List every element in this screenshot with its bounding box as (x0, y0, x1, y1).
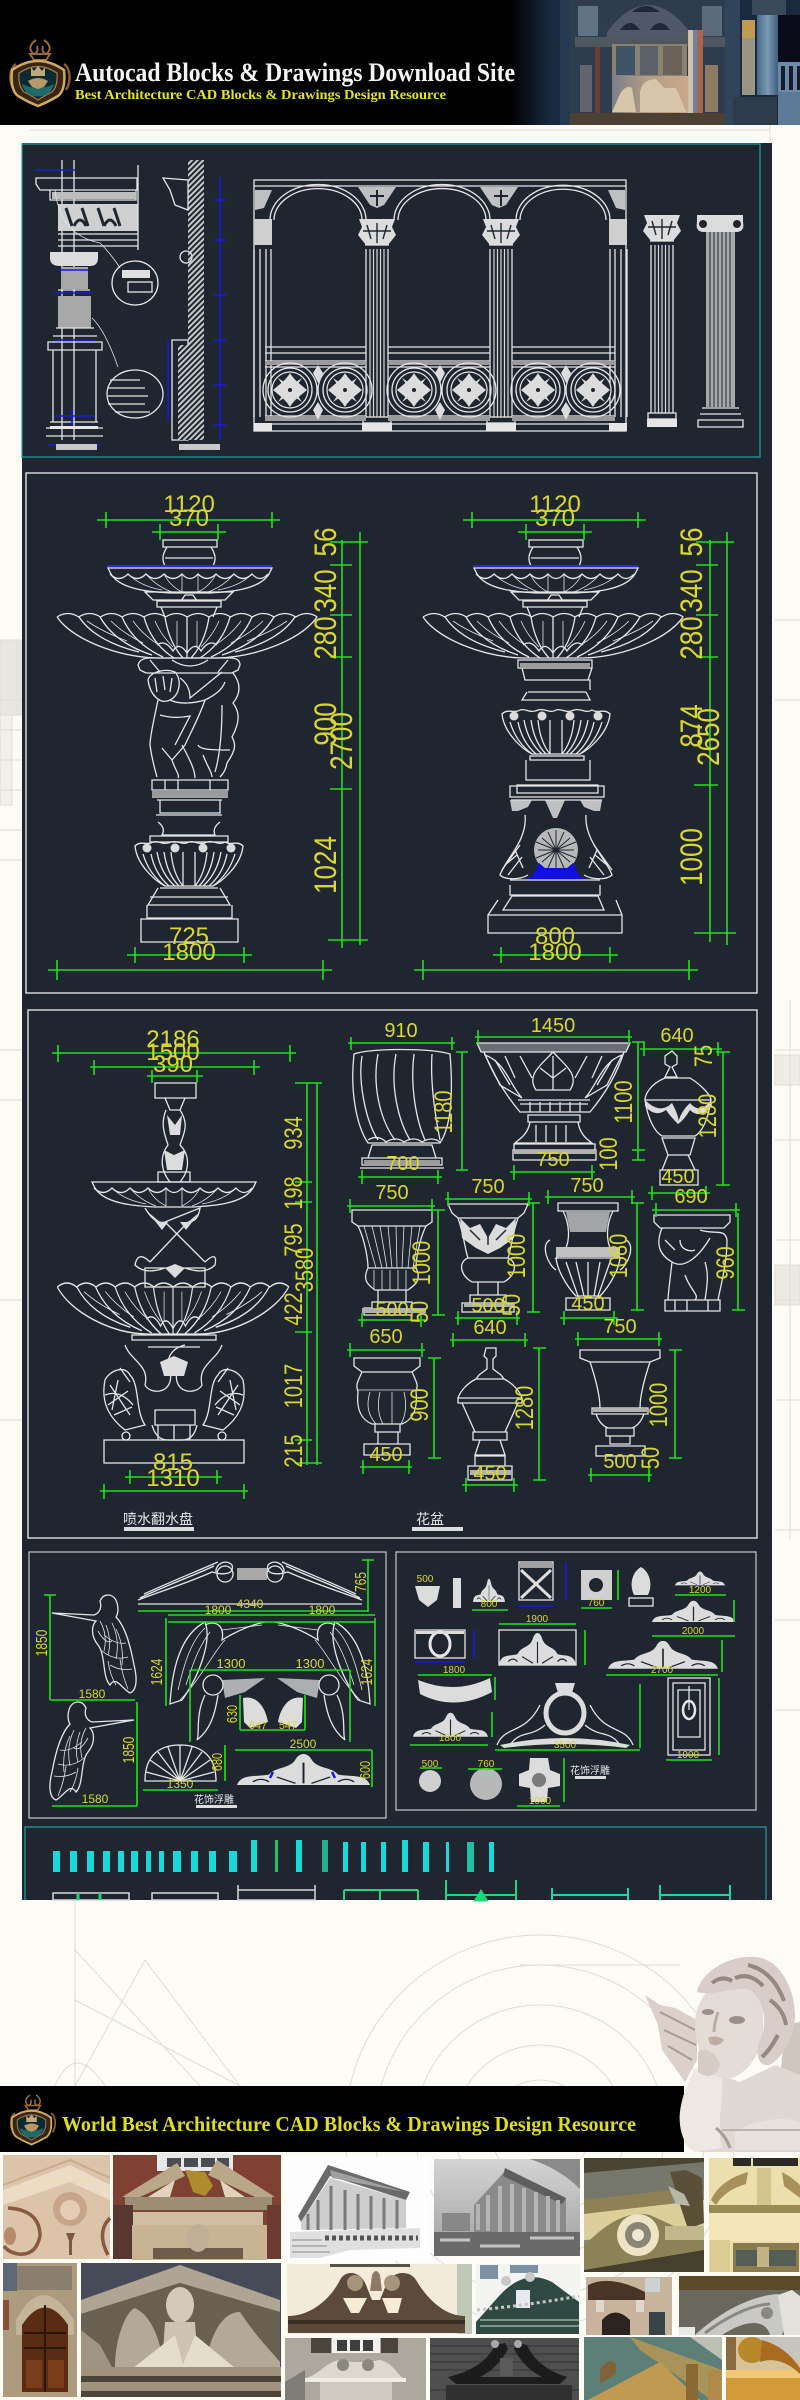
dimensions: fountain 2: 800 (535, 923, 575, 950)
dimensions: fountain 1: 370 (169, 505, 209, 532)
row one ornaments: 760 (588, 1598, 605, 1609)
photo collage (3, 2153, 800, 2400)
photo: parthenon engraving (285, 2157, 430, 2261)
dimensions: three tier fountain: 1017 (280, 1364, 308, 1408)
panel: three tier fountain and planters (28, 1010, 757, 1538)
planter: leaf vase: 700 (386, 1153, 420, 1175)
dimensions: fountain 2: 340 (675, 569, 710, 613)
dimensions: three tier fountain: 934 (280, 1116, 308, 1150)
photo: broken pediment (287, 2264, 472, 2334)
planter: plain urn: 50 (637, 1447, 665, 1469)
female figure right: 1580 (82, 1792, 109, 1806)
fan shell: 1350 (167, 1777, 194, 1791)
female figure right: 1850 (119, 1736, 137, 1763)
planter: cherub pedestal: 960 (712, 1246, 740, 1280)
rosettes: 1000 (529, 1796, 552, 1807)
fan shell (143, 1745, 225, 1791)
planter: handled amphora: 750 (570, 1175, 604, 1197)
dimensions: fountain 2: 56 (675, 528, 710, 556)
dark drawing sheet (22, 143, 772, 1900)
planter: lidded urn: 1280 (694, 1094, 722, 1138)
dimensions: fountain 2 (414, 491, 736, 980)
planter: swag urn: 500 (471, 1295, 505, 1317)
planter: lidded urn: 640 (660, 1025, 694, 1047)
planter: acanthus bowl: 100 (595, 1137, 623, 1171)
dimensions: three tier fountain: 1310 (146, 1465, 200, 1492)
dimensions: fountain 1: 1024 (309, 836, 344, 894)
photo: cream facade (709, 2158, 800, 2272)
arcade (254, 180, 627, 431)
photo: parthenon ruin (434, 2159, 580, 2256)
row two ornaments: 2700 (651, 1665, 674, 1676)
planter: cherub pedestal (652, 1203, 745, 1311)
broken pediment: 4340 (237, 1597, 264, 1611)
balusters row tall (251, 1840, 494, 1872)
scroll ornaments: 1300 (217, 1656, 245, 1671)
planter: leaf vase: 910 (384, 1020, 418, 1042)
dimensions: fountain 2: 1000 (675, 828, 710, 886)
photo: street facade (586, 2277, 672, 2335)
planter: fluted urn: 750 (375, 1182, 409, 1204)
swags and cartouche: 1800 (443, 1665, 466, 1676)
planter: lidded urn: 690 (674, 1186, 708, 1208)
dimensions: fountain 2: 280 (675, 616, 710, 660)
planter: swag urn: 750 (471, 1176, 505, 1198)
dimensions: fountain 2: 1120 (529, 491, 581, 518)
scroll ornaments: 1300 (296, 1656, 324, 1671)
footer title: World Best Architecture CAD Blocks & Drawings Design Resource (62, 2112, 636, 2136)
panel: colonnade drawings (22, 144, 760, 457)
row two ornaments: 1900 (526, 1614, 549, 1625)
broken pediment: 1800 (309, 1603, 336, 1617)
row one ornaments: 1200 (689, 1585, 712, 1596)
panel: two tier fountains (26, 473, 757, 993)
row one ornaments: 500 (417, 1574, 434, 1585)
header logo (10, 40, 70, 106)
balusters row short (53, 1851, 237, 1872)
broken pediment (138, 1560, 375, 1617)
photo: white brick pediment (285, 2338, 426, 2400)
planter: acanthus bowl: 1100 (610, 1081, 638, 1123)
dimensions: fountain 1: 1120 (163, 491, 215, 518)
fountain with cherub (57, 540, 317, 942)
planter: acanthus bowl (475, 1015, 645, 1180)
photo: stone medallion (3, 2155, 110, 2259)
scroll ornaments (190, 1656, 350, 1742)
dimensions: fountain 2: 2650 (692, 708, 727, 766)
planter: lidded amphora: 450 (473, 1463, 507, 1485)
photo: green gold pediment (584, 2337, 722, 2400)
dimensions: three tier fountain: 795 (280, 1223, 308, 1257)
dimensions: three tier fountain (52, 1026, 322, 1499)
rosettes: 500 (422, 1759, 439, 1770)
dimensions: three tier fountain: 390 (153, 1051, 193, 1078)
header title: Autocad Blocks & Drawings Download Site (75, 58, 515, 87)
three tier fountain (57, 1083, 289, 1463)
planter: fluted urn: 50 (406, 1301, 434, 1323)
planter: gadroon urn: 450 (369, 1444, 403, 1466)
swags and cartouche: 3500 (554, 1740, 577, 1751)
planter: leaf vase: 1180 (430, 1091, 458, 1133)
label: fountain title: 喷水翻水盘 (123, 1511, 193, 1527)
female figure left: 1580 (79, 1687, 106, 1701)
row two ornaments (415, 1614, 722, 1676)
footer banner (0, 2086, 684, 2152)
row one ornaments (415, 1562, 735, 1637)
dimensions: fountain 1: 900 (309, 702, 344, 746)
label: ornament title left: 花饰浮雕 (194, 1793, 234, 1806)
dimensions: three tier fountain: 198 (280, 1176, 308, 1210)
planter: lidded urn (640, 1025, 730, 1208)
dimensions: three tier fountain: 3580 (291, 1248, 319, 1292)
photo: brick pediment (113, 2153, 281, 2260)
planter: swag urn (445, 1176, 540, 1325)
broken pediment: 1800 (205, 1603, 232, 1617)
planter: fluted urn: 1000 (408, 1241, 436, 1285)
winged angels: 1624 (357, 1658, 375, 1685)
header subtitle: Best Architecture CAD Blocks & Drawings Design Resource (75, 88, 446, 103)
dimensions: fountain 2: 1800 (528, 939, 582, 966)
planter: gadroon urn (347, 1326, 441, 1474)
section drawing (163, 160, 226, 450)
dimensions: fountain 2: 874 (675, 704, 710, 748)
scroll ornaments: 547 (279, 1720, 297, 1732)
label: ornament title left (194, 1793, 237, 1808)
dimensions: fountain 1 (48, 491, 368, 980)
rosettes (419, 1758, 564, 1807)
planter: lidded urn: 75 (690, 1045, 718, 1067)
planter: lidded amphora: 1280 (511, 1386, 539, 1430)
planter: leaf vase (348, 1020, 468, 1184)
planter: acanthus bowl: 1450 (531, 1015, 575, 1037)
wide ornament: 600 (357, 1761, 373, 1779)
dimensions: three tier fountain: 215 (280, 1434, 308, 1468)
label: column elevation (56, 444, 97, 450)
dimensions: three tier fountain: 815 (153, 1449, 193, 1476)
dimensions: fountain 1: 340 (309, 569, 344, 613)
planter: handled amphora (545, 1175, 644, 1325)
single column left (643, 215, 681, 427)
fan shell: 680 (209, 1753, 225, 1771)
photo: sculpted tympanum (81, 2263, 281, 2397)
label: section (179, 444, 220, 450)
planter: plain urn: 500 (603, 1451, 637, 1473)
planter: gadroon urn: 650 (369, 1326, 403, 1348)
planter: fluted urn: 500 (375, 1299, 409, 1321)
label: planter title: 花盆 (416, 1511, 444, 1527)
row one ornaments: 2000 (682, 1626, 705, 1637)
dimensions: fountain 1: 725 (169, 923, 209, 950)
rosettes: 760 (478, 1759, 495, 1770)
photo: sculpted scroll cornice (584, 2158, 704, 2272)
planter: plain urn (575, 1316, 682, 1482)
header photo: gothic facade (510, 0, 800, 125)
dimensions: three tier fountain: 422 (280, 1292, 308, 1326)
planter: plain urn: 1000 (645, 1383, 673, 1427)
planter: handled amphora: 1080 (605, 1234, 633, 1278)
planter: plain urn: 750 (603, 1316, 637, 1338)
dimensions: fountain 1: 56 (309, 528, 344, 556)
photo: grey scroll pediment (430, 2338, 579, 2400)
planter: swag urn: 50 (498, 1294, 526, 1316)
planter: fluted urn (347, 1182, 445, 1327)
swags and cartouche: 1000 (677, 1750, 700, 1761)
planter: lidded amphora: 640 (473, 1317, 507, 1339)
broken pediment: 765 (351, 1572, 369, 1592)
winged angels (147, 1618, 375, 1706)
female figure left: 1850 (32, 1629, 50, 1656)
panel: carved ornaments left (29, 1552, 386, 1818)
label: planter title (412, 1511, 463, 1531)
planter: gadroon urn: 900 (406, 1388, 434, 1422)
scroll ornaments: 647 (249, 1720, 267, 1732)
dimensions: fountain 1: 2700 (325, 712, 360, 770)
winged angels: 1624 (147, 1658, 165, 1685)
photo: arched door (3, 2263, 77, 2397)
scroll ornaments: 630 (224, 1705, 240, 1723)
header banner (0, 0, 800, 125)
single ionic column right (697, 215, 743, 427)
column elevation with details (35, 160, 168, 450)
label: ornament title right: 花饰浮雕 (570, 1764, 610, 1777)
dimensions: fountain 1: 1800 (162, 939, 216, 966)
footer logo (11, 2095, 55, 2144)
railing elevations (53, 1880, 730, 1900)
row one ornaments: 800 (481, 1599, 498, 1610)
wide ornament (235, 1737, 373, 1787)
swags and cartouche: 1800 (439, 1733, 462, 1744)
swags and cartouche (410, 1665, 719, 1761)
female figure right (50, 1702, 137, 1806)
planter: swag urn: 1000 (503, 1234, 531, 1278)
female figure left (32, 1595, 136, 1701)
photo: green dormer (476, 2264, 580, 2334)
dimensions: three tier fountain: 1500 (146, 1039, 200, 1066)
dimensions: fountain 1: 280 (309, 616, 344, 660)
planter: handled amphora: 450 (571, 1293, 605, 1315)
dimensions: three tier fountain: 2186 (146, 1026, 200, 1053)
panel: carved ornaments right (396, 1552, 756, 1810)
planter: lidded urn: 450 (661, 1166, 695, 1188)
panel: baluster drawings (25, 1827, 766, 1900)
photo: white scroll detail (679, 2276, 800, 2335)
dimensions: fountain 2: 370 (535, 505, 575, 532)
photo: gilded ornament (726, 2337, 800, 2400)
wide ornament: 2500 (290, 1737, 317, 1751)
planter: acanthus bowl: 750 (536, 1149, 570, 1171)
cherub statue (645, 1957, 800, 2152)
planter: lidded amphora (450, 1317, 546, 1492)
fountain with dolphins (423, 540, 683, 933)
